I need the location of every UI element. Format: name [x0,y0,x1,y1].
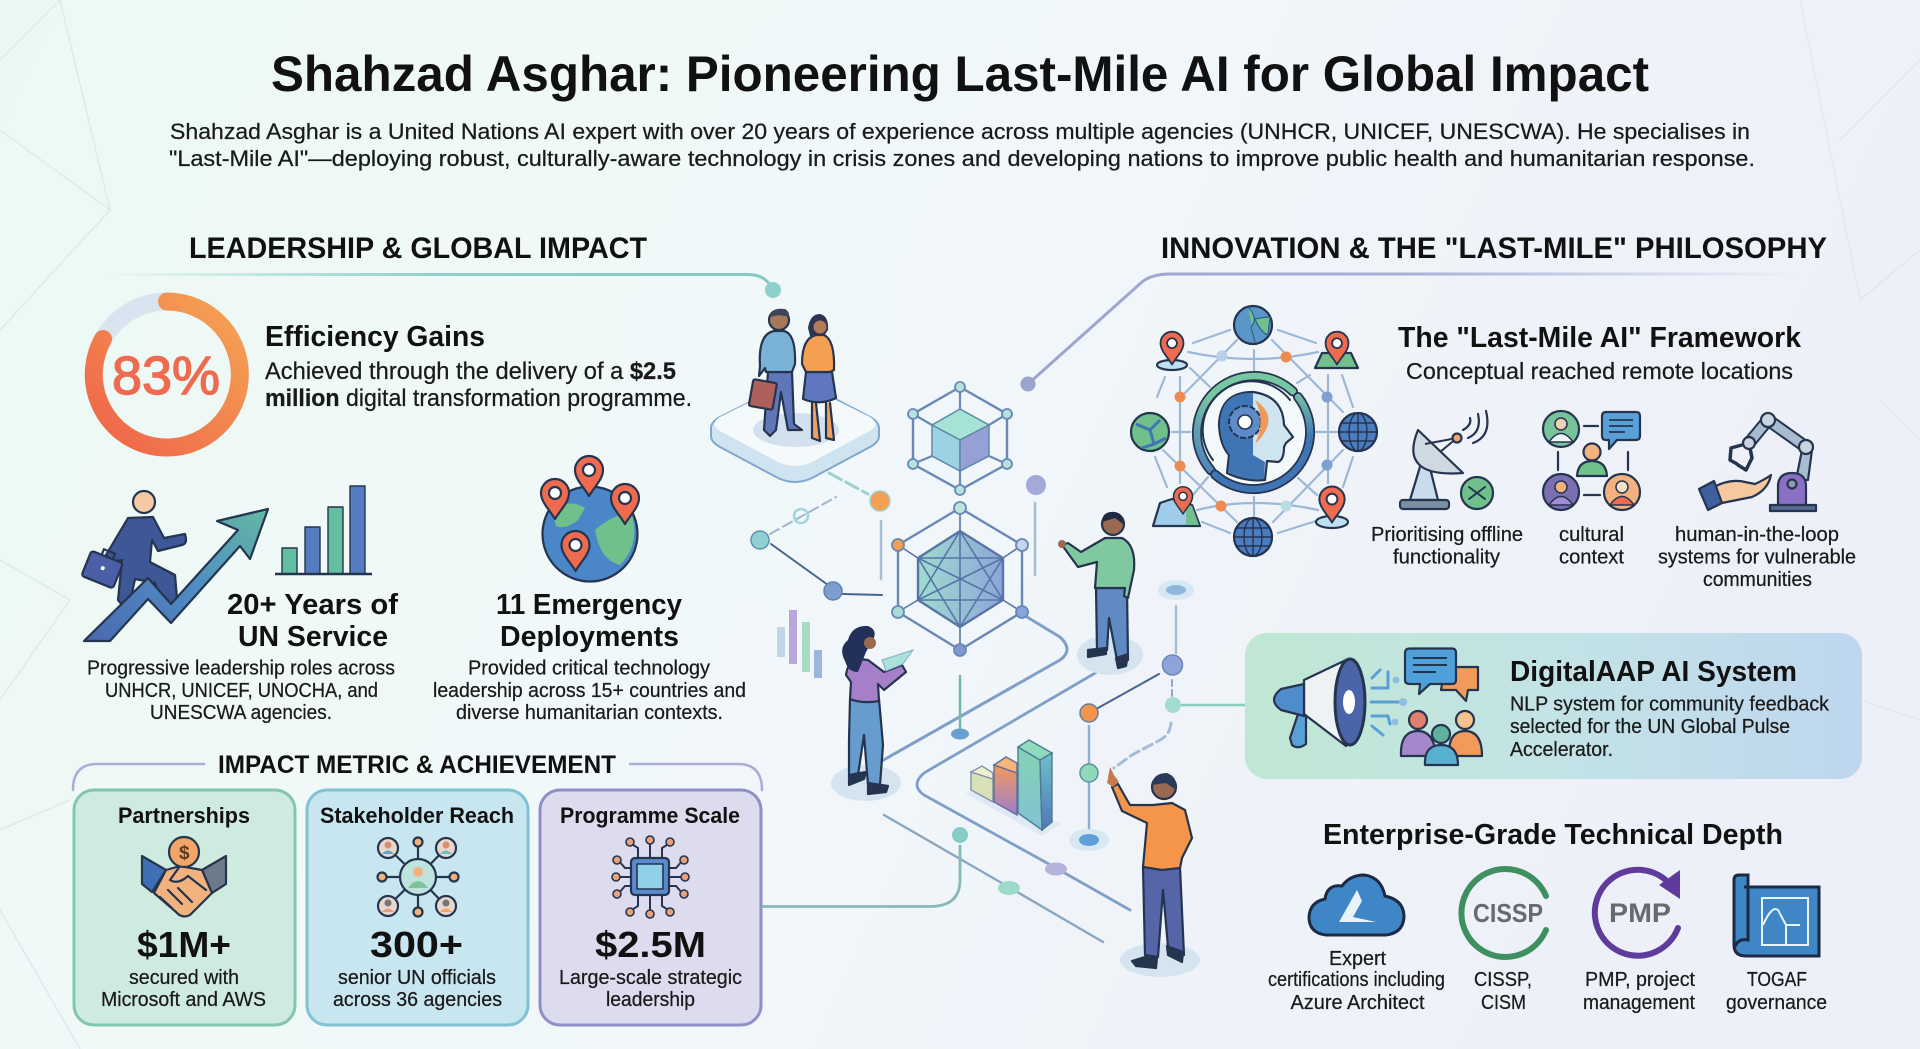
icon: satellite dish [1400,411,1493,509]
icon: cultural context people [1543,411,1640,510]
illustration: woman with tablet [831,626,913,801]
donut chart: 83% efficiency: 83% [112,346,220,406]
text block: 11 emergency deployments: diverse humanitarian contexts. [456,701,723,724]
illustration: two people on platform [711,309,879,482]
certification: CISSP: CISSP, [1474,969,1532,991]
icon: handshake with coin: $ [179,843,190,864]
certification: Azure Architect: certifications including [1268,969,1445,991]
illustration: man in green pointing [1058,512,1143,675]
certification: TOGAF: governance [1726,992,1827,1014]
panel: programme scale: leadership [606,989,695,1011]
panel: DigitalAAP AI system [1245,633,1862,779]
text block: efficiency gains [265,321,692,412]
panel: programme scale: Large-scale strategic [559,967,742,989]
certification: TOGAF: TOGAF [1747,969,1807,991]
text block: 20+ years of UN service: Progressive leadership roles across [87,656,395,680]
certification: Azure Architect: Expert [1329,948,1386,970]
text block: 11 emergency deployments: Deployments [500,621,679,653]
icon: robot arm and human hand [1699,413,1816,511]
icon: rising bar chart [275,486,372,574]
certification: Azure Architect: Azure Architect [1290,992,1425,1014]
panel: DigitalAAP AI system: selected for the UN Global Pulse [1510,715,1790,738]
icon: CISSP ring: CISSP [1473,898,1543,928]
text block: 11 emergency deployments [433,589,746,724]
labels: framework pillars: context [1559,546,1624,568]
labels: framework pillars: cultural [1559,523,1624,546]
intro text block: Shahzad Asghar is a United Nations AI expert with over 20 years of experience across multiple agencies (UNHCR, UNICEF, UNESCWA). He specialises in [170,119,1750,144]
certification: PMP: management [1583,992,1695,1014]
text block: 20+ years of UN service: UNESCWA agencies. [150,701,332,724]
labels: framework pillars: functionality [1393,546,1501,568]
connector: leadership line [102,274,781,298]
icon: microchip [612,836,689,918]
panel: DigitalAAP AI system: Accelerator. [1510,738,1613,761]
text block: 11 emergency deployments: Provided critical technology [468,656,711,680]
panel: programme scale [540,790,761,1025]
text block: efficiency gains: million digital transformation programme. [265,385,692,412]
panel: stakeholder reach [307,790,528,1025]
text block: 11 emergency deployments: leadership across 15+ countries and [433,679,746,702]
certification: PMP: PMP, project [1585,969,1695,991]
panel: partnerships [74,790,295,1025]
heading: impact metric and achievement: IMPACT METRIC & ACHIEVEMENT [218,751,616,779]
icon: PMP ring with arrow [1595,870,1680,956]
icon: handshake with coin [142,837,226,916]
text block: 11 emergency deployments: 11 Emergency [496,589,682,621]
certification: CISSP [1461,869,1546,1014]
illustration: faded mini bar chart [777,610,822,678]
intro text block: "Last-Mile AI"—deploying robust, culturally-aware technology in crisis zones and developing nations to improve public health and humanitarian response. [169,146,1755,171]
text block: 20+ years of UN service: UN Service [238,621,388,653]
labels: framework pillars [1371,523,1856,591]
heading: leadership and global impact: LEADERSHIP & GLOBAL IMPACT [189,232,647,265]
circuit nodes [751,376,1194,895]
heading: last-mile AI framework: Conceptual reached remote locations [1406,358,1793,384]
donut chart: 83% efficiency [94,302,240,448]
heading: enterprise-grade technical depth: Enterprise-Grade Technical Depth [1323,819,1783,851]
panel: partnerships: Microsoft and AWS [101,989,266,1011]
icon: stakeholder network [378,838,458,916]
illustration: wireframe cube upper [908,382,1012,495]
panel: partnerships: $1M+ [137,924,231,965]
illustration: 3D bar chart [965,740,1060,836]
certification: TOGAF [1726,875,1827,1014]
text block: 20+ years of UN service: 20+ Years of [227,589,398,621]
panel: DigitalAAP AI system: NLP system for community feedback [1510,692,1830,716]
panel: stakeholder reach: Stakeholder Reach [320,803,514,828]
connector network: central circuit lines [763,274,1800,942]
icon: speech bubbles and community [1401,648,1482,765]
text block: 20+ years of UN service [87,589,398,724]
icon: blueprint [1734,875,1819,956]
panel: DigitalAAP AI system: DigitalAAP AI System [1510,656,1797,688]
panel: partnerships: Partnerships [118,803,250,828]
heading: innovation and the last-mile philosophy: INNOVATION & THE "LAST-MILE" PHILOSOPHY [1161,232,1827,265]
icon: climbing businessperson with arrow [81,491,268,641]
labels: framework pillars: systems for vulnerable [1658,546,1856,568]
heading: last-mile AI framework: The "Last-Mile AI" Framework [1398,322,1802,354]
icon: AI hub network [1131,306,1377,556]
labels: framework pillars: human-in-the-loop [1675,523,1839,546]
heading: last-mile AI framework [1398,322,1802,384]
labels: framework pillars: communities [1703,568,1812,591]
certification: Azure Architect [1268,875,1445,1014]
panel: programme scale: Programme Scale [560,803,740,828]
panel: stakeholder reach: across 36 agencies [333,989,502,1011]
icon: PMP ring with arrow: PMP [1609,898,1671,928]
certification: CISSP: CISM [1481,992,1526,1014]
panel: stakeholder reach: 300+ [370,924,463,965]
icon: CISSP ring [1461,869,1546,957]
impact metric bracket [73,764,762,790]
certification: PMP [1583,870,1695,1014]
labels: framework pillars: Prioritising offline [1371,523,1523,546]
illustration: man in orange pointing up [1107,767,1200,977]
panel: programme scale: $2.5M [595,924,706,965]
icon: megaphone [1274,659,1407,747]
title: Shahzad Asghar: Pioneering Last-Mile AI for Global Impact [271,46,1649,102]
panel: partnerships: secured with [129,967,239,989]
text block: 20+ years of UN service: UNHCR, UNICEF, UNOCHA, and [105,679,378,702]
icon: globe with map pins [541,456,639,582]
icon: cloud [1309,875,1404,935]
panel: stakeholder reach: senior UN officials [338,967,496,989]
illustration: wireframe cube central [892,502,1028,656]
text block: efficiency gains: Efficiency Gains [265,321,485,353]
intro text block [169,119,1755,171]
text block: efficiency gains: Achieved through the delivery of a $2.5 [265,358,676,385]
